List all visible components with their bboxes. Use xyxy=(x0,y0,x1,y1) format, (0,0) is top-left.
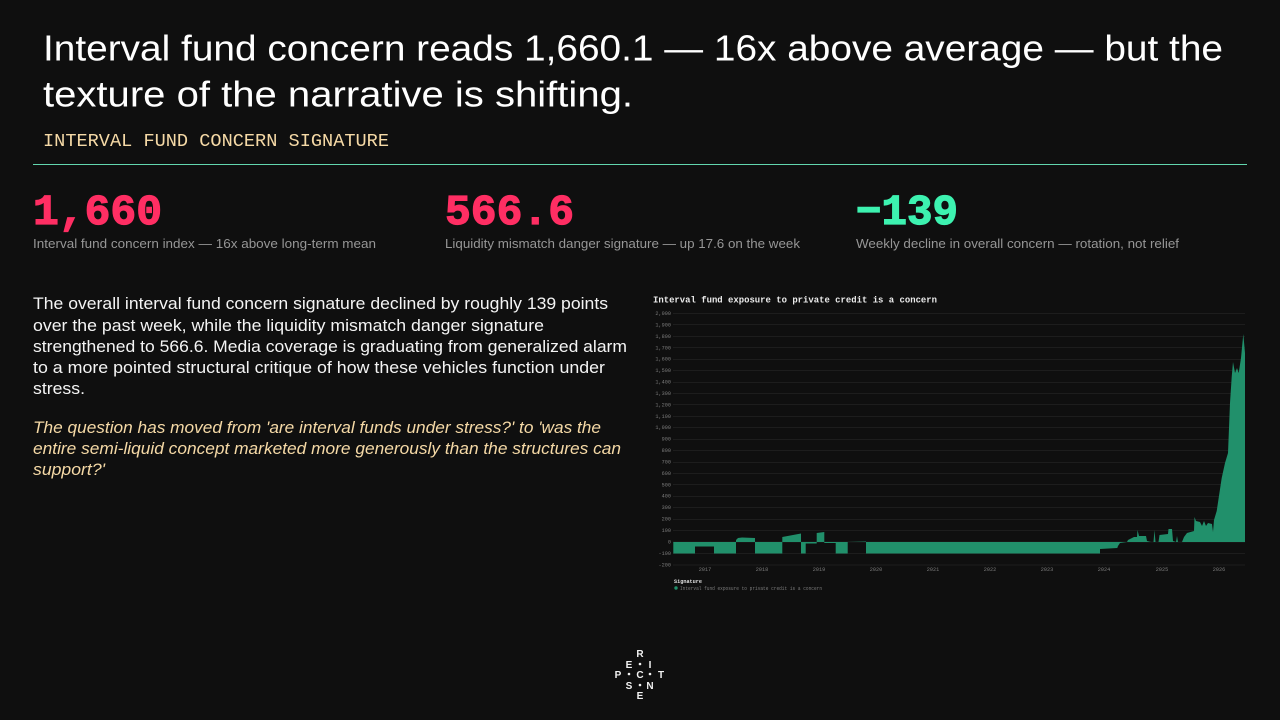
y axis labels: -200 xyxy=(659,562,671,568)
y axis labels: 1,300 xyxy=(655,391,671,397)
chart title: Interval fund exposure to private credit is a concern xyxy=(653,296,937,306)
x axis labels: 2018 xyxy=(756,567,768,573)
logo: S xyxy=(626,681,633,692)
y axis labels: 300 xyxy=(662,505,671,511)
x axis labels: 2020 xyxy=(870,567,882,573)
y axis labels: 400 xyxy=(662,494,671,500)
y axis labels: 0 xyxy=(668,539,671,545)
logo: I xyxy=(649,660,652,671)
y axis labels: -100 xyxy=(659,551,671,557)
stat: concern index: 1,660 xyxy=(33,188,162,237)
stat: liquidity mismatch: 566.6 xyxy=(445,188,574,237)
y axis labels: 1,900 xyxy=(655,322,671,328)
x axis labels: 2024 xyxy=(1098,567,1110,573)
stat: liquidity mismatch: Liquidity mismatch danger signature — up 17.6 on the week xyxy=(445,237,801,251)
y axis labels: 1,800 xyxy=(655,334,671,340)
y axis labels: 1,200 xyxy=(655,402,671,408)
legend xyxy=(674,578,822,592)
y axis labels: 1,600 xyxy=(655,357,671,363)
stat: weekly decline: −139 xyxy=(856,188,958,237)
x axis labels: 2026 xyxy=(1213,567,1225,573)
legend: Interval fund exposure to private credit is a concern xyxy=(680,586,822,592)
y axis labels: 200 xyxy=(662,517,671,523)
y axis labels: 900 xyxy=(662,437,671,443)
italic callout: support?' xyxy=(33,461,106,479)
logo: C xyxy=(636,670,644,681)
body text: strengthened to 566.6. Media coverage is graduating from generalized alarm xyxy=(33,338,627,356)
stat: liquidity mismatch xyxy=(445,188,801,251)
title xyxy=(43,28,1223,114)
y axis labels: 500 xyxy=(662,482,671,488)
italic callout xyxy=(33,419,621,479)
x axis labels: 2022 xyxy=(984,567,996,573)
subtitle: INTERVAL FUND CONCERN SIGNATURE xyxy=(43,131,389,152)
stat: concern index: Interval fund concern index — 16x above long-term mean xyxy=(33,237,376,251)
y axis labels: 2,000 xyxy=(655,311,671,317)
stat: weekly decline xyxy=(856,188,1180,251)
y axis labels: 600 xyxy=(662,471,671,477)
logo xyxy=(615,649,664,702)
signature area series xyxy=(673,334,1245,554)
x axis labels: 2025 xyxy=(1156,567,1168,573)
x axis labels: 2023 xyxy=(1041,567,1053,573)
x axis labels: 2021 xyxy=(927,567,939,573)
title: texture of the narrative is shifting. xyxy=(43,74,633,114)
italic callout: The question has moved from 'are interval funds under stress?' to 'was the xyxy=(33,419,601,437)
x axis labels xyxy=(699,567,1225,573)
y axis labels: 1,500 xyxy=(655,368,671,374)
stat: weekly decline: Weekly decline in overall concern — rotation, not relief xyxy=(856,237,1180,251)
y axis labels: 1,400 xyxy=(655,380,671,386)
logo: P xyxy=(615,670,622,681)
logo: E xyxy=(637,691,644,702)
y axis labels: 1,700 xyxy=(655,345,671,351)
logo: N xyxy=(646,681,654,692)
stat: concern index xyxy=(33,188,376,251)
logo: T xyxy=(658,670,664,681)
y axis labels: 1,000 xyxy=(655,425,671,431)
body text: to a more pointed structural critique of how these vehicles function under xyxy=(33,359,606,377)
legend: Signature xyxy=(674,578,703,585)
y axis labels: 100 xyxy=(662,528,671,534)
italic callout: entire semi-liquid concept marketed more generously than the structures can xyxy=(33,440,621,458)
x axis labels: 2017 xyxy=(699,567,711,573)
y axis labels: 700 xyxy=(662,460,671,466)
logo: R xyxy=(636,649,644,660)
title: Interval fund concern reads 1,660.1 — 16x above average — but the xyxy=(43,28,1223,68)
x axis labels: 2019 xyxy=(813,567,825,573)
body text: The overall interval fund concern signature declined by roughly 139 points xyxy=(33,295,608,313)
y axis labels xyxy=(655,311,671,568)
body text: stress. xyxy=(33,380,85,398)
y axis labels: 800 xyxy=(662,448,671,454)
y axis labels: 1,100 xyxy=(655,414,671,420)
body text: over the past week, while the liquidity mismatch danger signature xyxy=(33,317,544,335)
body text xyxy=(33,295,627,398)
area chart xyxy=(653,296,1245,592)
logo: E xyxy=(626,660,633,671)
